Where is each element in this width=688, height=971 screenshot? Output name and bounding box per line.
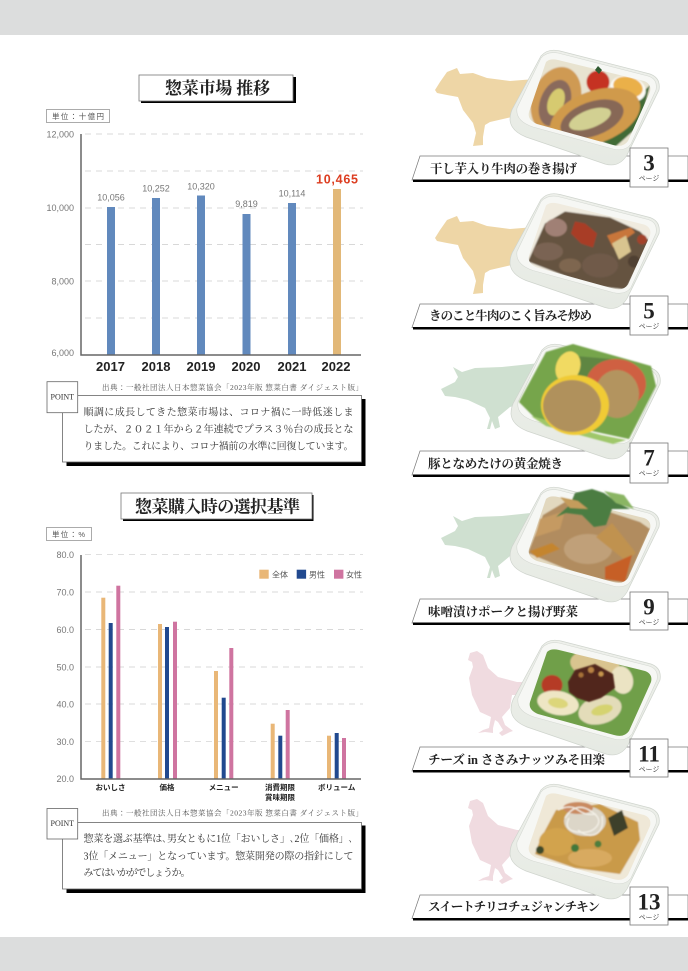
callout: point [47, 382, 366, 466]
caption bar: チーズ in ささみナッツみそ田楽 [428, 752, 605, 767]
food container [510, 50, 659, 165]
bar chart: criteria: ボリューム [318, 782, 356, 792]
bar chart: criteria [56, 550, 363, 802]
callout: point: したが、２０２１年から２年連続でプラス３％台の成長とな [84, 422, 354, 436]
callout: point: りました。これにより、コロナ禍前の水準に回復しています。 [84, 440, 354, 452]
caption bar [412, 747, 688, 772]
callout: point: 惣菜を選ぶ基準は､男女ともに1位「おいしさ」､2位「価格」､ [84, 832, 354, 845]
bar chart: criteria: 50.0 [56, 662, 74, 672]
caption bar: スイートチリコチュジャンチキン [428, 900, 600, 914]
bar chart: market size: 2017 [96, 359, 125, 374]
bar chart: criteria: メニュー [209, 783, 239, 792]
caption bar [412, 156, 688, 182]
callout: point: 順調に成長してきた惣菜市場は、コロナ禍に一時低迷しま [84, 406, 354, 418]
panel: selection criteria [46, 493, 366, 893]
legend: 男性 [309, 570, 325, 580]
caption bar: 干し芋入り牛肉の巻き揚げ [430, 161, 577, 176]
page badge [630, 296, 668, 335]
bar chart: market size: 10,252 [142, 184, 170, 194]
panel: market trend [46, 75, 366, 466]
bar chart: market size: 10,114 [279, 188, 305, 198]
page badge: 5 [643, 298, 655, 324]
food container [511, 344, 660, 459]
bar chart: criteria: おいしさ [96, 783, 126, 792]
icon: pig silhouette [441, 363, 540, 429]
bar chart: market size: 2021 [278, 359, 306, 374]
top band [0, 0, 688, 35]
bar chart: criteria: 価格 [160, 782, 175, 792]
page badge [630, 443, 668, 483]
unit label [46, 528, 92, 540]
bar chart: criteria: 80.0 [56, 550, 74, 560]
callout: point: みてはいかがでしょうか。 [84, 867, 190, 879]
page badge: ページ [639, 766, 659, 774]
bottom band [0, 937, 688, 971]
page badge: ページ [639, 914, 659, 922]
dish 3: pork and enoki [412, 344, 688, 483]
bar chart: criteria: 60.0 [56, 625, 74, 635]
caption bar [412, 304, 688, 330]
food container [510, 784, 659, 899]
heading: market trend: 惣菜市場 推移 [165, 78, 270, 98]
icon: chicken silhouette [468, 651, 530, 736]
dish 1: beef roll [412, 50, 688, 187]
page badge: 7 [643, 446, 655, 470]
food container [510, 487, 659, 602]
source note: 出典：一般社団法人日本惣菜協会「2023年版 惣菜白書 ダイジェスト版」 [102, 808, 363, 818]
page badge [630, 592, 668, 630]
bar chart: market size: 8,000 [51, 276, 74, 286]
bar chart: market size: 6,000 [51, 348, 74, 358]
page badge: 13 [638, 890, 660, 914]
page badge: ページ [639, 618, 659, 626]
icon: pig silhouette [441, 512, 540, 578]
bar chart: criteria: 40.0 [56, 700, 74, 710]
food container [511, 640, 660, 755]
caption bar: 豚となめたけの黄金焼き [428, 456, 563, 471]
page badge [630, 739, 668, 777]
bar chart: market size: 9,819 [235, 199, 258, 209]
legend: 女性 [346, 570, 362, 580]
bar chart: criteria: 消費期限 [265, 782, 295, 792]
dish 4: miso pork [412, 487, 688, 630]
page badge: 3 [643, 150, 655, 176]
source note: 出典：一般社団法人日本惣菜協会「2023年版 惣菜白書 ダイジェスト版」 [102, 382, 363, 392]
icon: cow silhouette [435, 216, 535, 294]
bar chart: market size: 2019 [187, 359, 215, 374]
bar chart: market size: 10,000 [46, 203, 74, 213]
callout: point [47, 808, 366, 893]
page badge: 9 [643, 594, 655, 620]
bar chart: market size [46, 130, 363, 374]
callout: point: 3位「メニュー」となっています。惣菜開発の際の指針にして [84, 850, 354, 862]
bar chart: market size: 10,320 [187, 182, 215, 192]
dish 2: beef and mushroom [412, 194, 688, 335]
bar chart: market size: 10,465 [316, 172, 358, 186]
page badge: 11 [638, 742, 660, 766]
legend [259, 570, 362, 580]
caption bar [412, 451, 688, 477]
icon: cow silhouette [435, 68, 535, 146]
page badge: ページ [639, 174, 659, 182]
page badge [630, 887, 668, 925]
bar chart: market size: 10,056 [97, 192, 125, 202]
bar chart: criteria: 70.0 [56, 588, 74, 598]
caption bar [412, 599, 688, 625]
bar chart: market size: 12,000 [46, 130, 74, 140]
page badge [630, 148, 668, 187]
unit label [46, 110, 110, 122]
bar chart: market size: 2020 [232, 359, 260, 374]
unit label: 単位：十億円 [52, 111, 104, 121]
page badge: ページ [639, 470, 659, 478]
bar chart: criteria: 賞味期限 [265, 792, 295, 802]
page badge: ページ [639, 322, 659, 330]
heading: market trend [139, 75, 296, 103]
bar chart: market size: 2022 [322, 359, 350, 374]
dish 5: cheese chicken [412, 640, 688, 777]
dish 6: sweet chili chicken [412, 784, 688, 925]
callout: point: POINT [51, 819, 74, 828]
callout: point: POINT [51, 392, 74, 402]
caption bar: 味噌漬けポークと揚げ野菜 [428, 604, 578, 619]
caption bar: きのこと牛肉のこく旨みそ炒め [429, 308, 592, 323]
heading: selection criteria [121, 493, 314, 521]
caption bar [412, 895, 688, 920]
heading: selection criteria: 惣菜購入時の選択基準 [135, 496, 300, 516]
unit label: 単位：% [52, 529, 85, 539]
bar chart: market size: 2018 [142, 359, 170, 374]
icon: chicken silhouette [468, 799, 530, 884]
bar chart: criteria: 20.0 [56, 774, 74, 784]
legend: 全体 [272, 570, 288, 580]
food container [510, 194, 659, 308]
bar chart: criteria: 30.0 [56, 737, 74, 747]
